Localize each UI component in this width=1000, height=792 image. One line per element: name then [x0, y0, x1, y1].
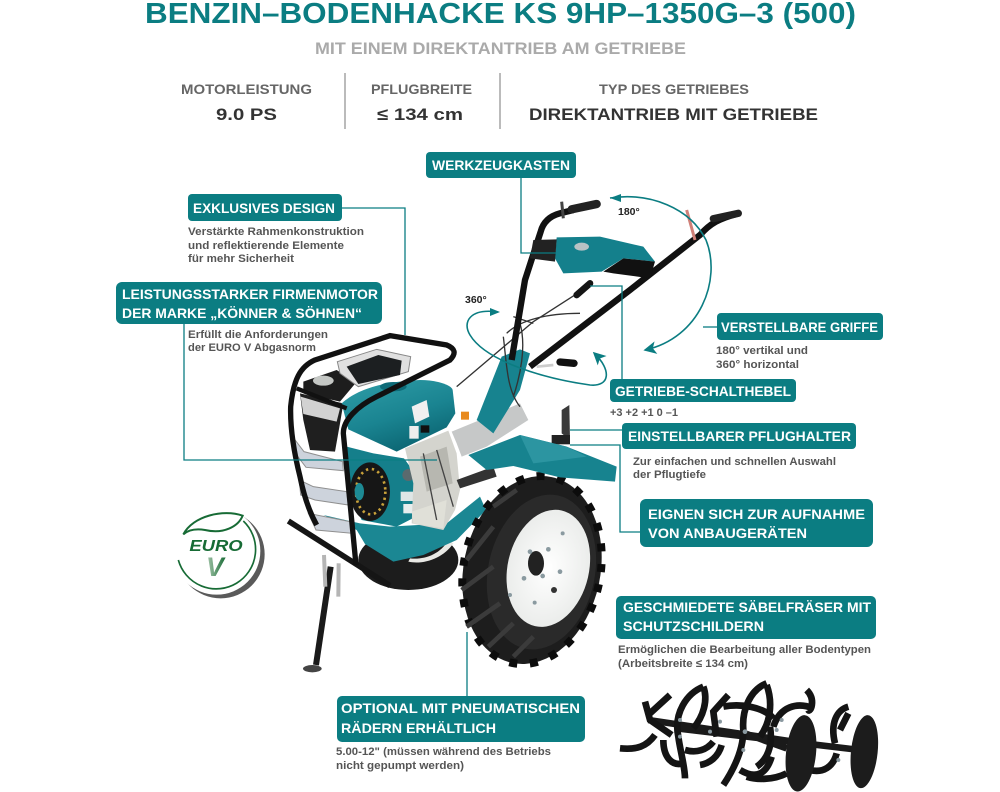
tiller machine illustration — [288, 202, 738, 677]
spec: gearbox type: TYP DES GETRIEBES — [599, 81, 749, 97]
panel: exklusives design — [188, 194, 364, 265]
text: gear steps: +3 +2 +1 0 –1 — [610, 407, 678, 419]
text: säbelfräser description: Ermöglichen die Bearbeitung aller Bodentypen — [618, 644, 871, 656]
heading: pflughalter — [622, 423, 856, 449]
fuel tank — [342, 380, 455, 452]
spec: plough width: ≤ 134 cm — [377, 105, 463, 124]
heading: wheels: RÄDERN ERHÄLTLICH — [341, 720, 496, 736]
angle label 180: 180° — [618, 206, 640, 218]
shaft — [648, 720, 860, 750]
recoil starter — [350, 462, 390, 521]
text: motor description — [188, 329, 328, 354]
text: wheels description — [336, 746, 551, 772]
connector lines — [184, 178, 717, 696]
text: design description — [188, 226, 364, 265]
heading: säbelfräser: SCHUTZSCHILDERN — [623, 618, 764, 634]
gear link rods — [457, 292, 580, 407]
text: pflughalter description: Zur einfachen und schnellen Auswahl — [633, 456, 836, 468]
text: säbelfräser description: (Arbeitsbreite ≤ 134 cm) — [618, 658, 748, 670]
orange oil cap — [461, 412, 469, 420]
air filter — [337, 349, 411, 387]
side stand — [303, 555, 339, 672]
arrow: 360 degree rotation — [467, 311, 606, 385]
spec row — [181, 73, 818, 129]
angle label 360: 360° — [465, 294, 487, 306]
fuel cap — [313, 376, 334, 386]
text: griffe description — [716, 345, 808, 371]
label: anbaugeräte: VON ANBAUGERÄTEN — [648, 525, 807, 541]
text: motor description: Erfüllt die Anforderungen — [188, 329, 328, 341]
label: anbaugeräte — [640, 499, 873, 547]
spec: gearbox type — [529, 81, 818, 124]
spec: gearbox type: DIREKTANTRIEB MIT GETRIEBE — [529, 105, 818, 124]
arrow head: 180 start — [610, 194, 621, 202]
spec: plough width: PFLUGBREITE — [371, 81, 472, 97]
heading: säbelfräser — [616, 596, 876, 639]
panel: motor — [116, 282, 382, 354]
filler neck — [380, 382, 407, 391]
tyre lugs — [462, 490, 533, 657]
panel: verstellbare griffe — [716, 313, 883, 371]
subtitle: MIT EINEM DIREKTANTRIEB AM GETRIEBE — [315, 39, 686, 58]
housing details — [401, 469, 416, 513]
heading: motor: DER MARKE „KÖNNER & SÖHNEN“ — [122, 305, 362, 321]
text: design description: für mehr Sicherheit — [188, 253, 294, 265]
heading: motor: LEISTUNGSSTARKER FIRMENMOTOR — [122, 286, 378, 302]
engine cylinder — [405, 431, 460, 530]
rear wheel — [358, 530, 458, 590]
tank labels — [409, 400, 429, 439]
heading: griffe — [717, 313, 883, 340]
heading: wheels — [337, 696, 585, 742]
right handlebar — [530, 214, 737, 367]
bolts — [678, 718, 840, 762]
text: pflughalter description — [633, 456, 836, 481]
panel: getriebe-schalthebel — [610, 379, 796, 419]
side discs — [782, 714, 881, 792]
text: motor description: der EURO V Abgasnorm — [188, 342, 316, 354]
rear gas tank — [303, 370, 356, 402]
heading: pflughalter: EINSTELLBARER PFLUGHALTER — [628, 428, 851, 444]
heading: schalthebel — [610, 379, 796, 402]
heading: motor — [116, 282, 382, 324]
arrow: 180 degree tilt — [610, 197, 711, 350]
plough holder — [552, 405, 570, 444]
recoil housing — [347, 447, 417, 527]
panel: pneumatic wheels — [336, 696, 585, 772]
transmission column — [477, 349, 530, 433]
fender — [468, 435, 617, 482]
heading: exklusives design — [188, 194, 342, 221]
text: wheels description: 5.00-12" (müssen während des Betriebs — [336, 746, 551, 758]
spec: motor power: 9.0 PS — [216, 105, 277, 124]
gear lever knob — [577, 283, 590, 295]
panel: pflughalter — [622, 423, 856, 481]
text: design description: Verstärkte Rahmenkonstruktion — [188, 226, 364, 238]
heading: exklusives design: EXKLUSIVES DESIGN — [193, 200, 335, 216]
spec: motor power: MOTORLEISTUNG — [181, 81, 312, 97]
heading: griffe: VERSTELLBARE GRIFFE — [721, 319, 878, 335]
heading: schalthebel: GETRIEBE-SCHALTHEBEL — [615, 383, 791, 399]
text: pflughalter description: der Pflugtiefe — [633, 469, 706, 481]
text: design description: und reflektierende Elemente — [188, 240, 344, 252]
text: griffe description: 180° vertikal und — [716, 345, 808, 357]
teal tray — [323, 497, 486, 562]
panel: säbelfräser — [616, 596, 876, 670]
text: griffe description: 360° horizontal — [716, 359, 799, 371]
front tyre — [445, 463, 619, 677]
text: säbelfräser description — [618, 644, 871, 670]
gearbox housing — [452, 403, 528, 457]
spec: motor power — [181, 81, 312, 124]
spec: plough width — [371, 81, 472, 124]
label: anbaugeräte: EIGNEN SICH ZUR AUFNAHME — [648, 506, 865, 522]
rim — [495, 501, 601, 635]
protective frame — [291, 336, 454, 565]
icon: euro V badge — [173, 507, 265, 598]
toolbox — [530, 237, 655, 278]
left grip — [562, 202, 597, 218]
bottom rail — [288, 521, 390, 586]
image: tiller blades — [620, 683, 881, 792]
left handlebar — [512, 210, 573, 360]
side lever — [537, 362, 574, 367]
heading: wheels: OPTIONAL MIT PNEUMATISCHEN — [341, 700, 580, 716]
text: wheels description: nicht gepumpt werden) — [336, 760, 464, 772]
label: Werkzeugkasten — [426, 152, 576, 178]
arrow head: 360 start — [490, 308, 500, 316]
right grip and levers — [687, 210, 738, 240]
rear engine block — [300, 393, 343, 452]
icon: euro V badge: V — [206, 552, 226, 582]
label: Werkzeugkasten: WERKZEUGKASTEN — [432, 157, 570, 173]
blades — [620, 683, 848, 785]
icon: euro V badge: EURO — [189, 538, 243, 555]
heading: säbelfräser: GESCHMIEDETE SÄBELFRÄSER MIT — [623, 599, 871, 615]
reflective strips — [290, 433, 353, 533]
